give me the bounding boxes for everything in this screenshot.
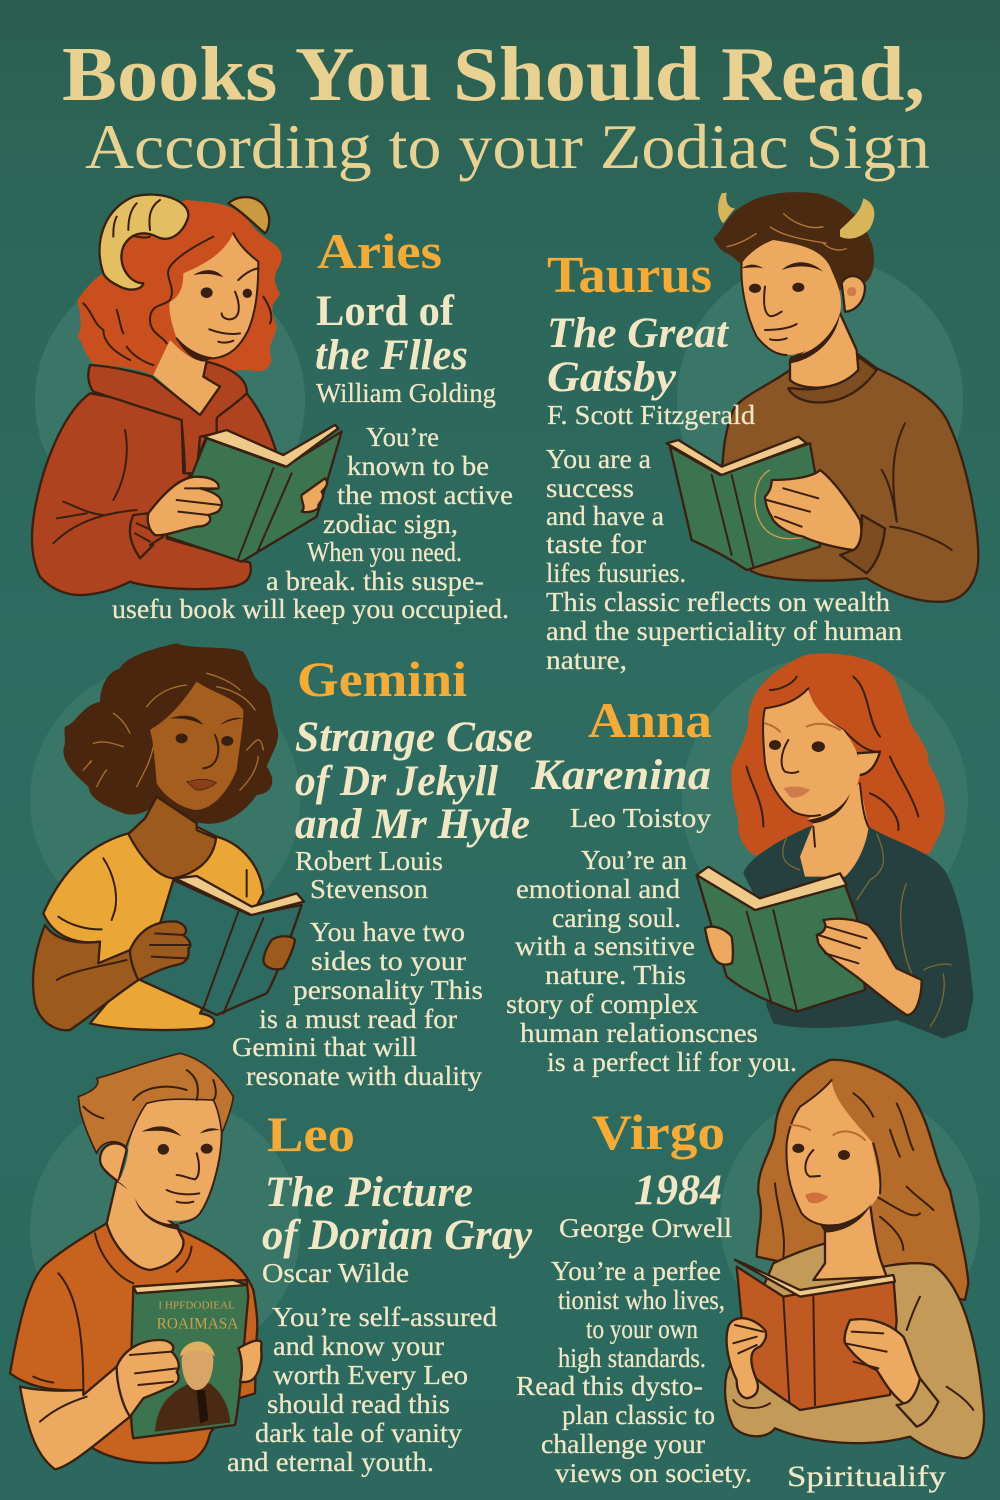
text block: Aries description: You’re — [366, 422, 439, 452]
text block: Taurus description: lifes fusuries. — [546, 558, 686, 588]
panel: Leo — [10, 1053, 533, 1477]
text block: Virgo description — [516, 1256, 752, 1488]
text block: Anna Karenina description: emotional and — [516, 874, 681, 904]
text block: Virgo description: You’re a perfee — [551, 1256, 721, 1286]
text block: Leo description: You’re self-assured — [272, 1302, 498, 1332]
book title: Lord of the Flles — [315, 288, 468, 379]
text block: Leo description: should read this — [267, 1389, 450, 1419]
book title: Lord of the Flles: the Flles — [315, 332, 468, 379]
text block: Gemini description: is a must read for — [259, 1004, 457, 1034]
illustration: reader with long red hair — [697, 653, 973, 1038]
author: William Golding: William Golding — [316, 378, 496, 408]
book title: Strange Case of Dr Jekyll and Mr Hyde: Strange Case — [295, 714, 533, 761]
book title: The Great Gatsby — [547, 310, 730, 401]
text block: Gemini description: Gemini that will — [232, 1032, 417, 1062]
text block: Aries description: usefu book will keep you occupied. — [112, 594, 509, 624]
title: According to your Zodiac Sign — [85, 112, 930, 182]
text block: Leo description — [227, 1302, 498, 1477]
text block: Virgo description: Read this dysto- — [516, 1371, 703, 1401]
text block: Virgo description: tionist who lives, — [558, 1285, 725, 1315]
text block: Virgo description: high standards. — [558, 1343, 706, 1373]
text block: Aries description: known to be — [347, 451, 489, 481]
illustration: Taurus reader with bull horns — [667, 192, 978, 602]
illustration: Leo reader with Dorian Gray book: I HPFDODIEAL — [158, 1300, 235, 1311]
text block: Leo description: worth Every Leo — [273, 1360, 468, 1390]
book title: Strange Case of Dr Jekyll and Mr Hyde: of Dr Jekyll — [295, 758, 498, 805]
heading: Virgo: Virgo — [592, 1104, 725, 1160]
credit: Spiritualify: Spiritualify — [787, 1460, 946, 1493]
book title: Lord of the Flles: Lord of — [316, 288, 455, 335]
text block: Anna Karenina description: human relationscnes — [520, 1018, 758, 1048]
text block: Taurus description: taste for — [546, 529, 646, 559]
book title: The Great Gatsby: Gatsby — [547, 354, 677, 401]
text block: Gemini description: resonate with duality — [246, 1061, 483, 1091]
book title: The Picture of Dorian Gray — [262, 1169, 533, 1259]
text block: Gemini description: personality This — [293, 975, 483, 1005]
heading: Aries: Aries — [317, 223, 442, 279]
text block: Aries description: zodiac sign, — [323, 509, 458, 539]
author: Robert Louis Stevenson — [295, 846, 443, 904]
book title: Anna Karenina — [530, 692, 712, 799]
text block: Anna Karenina description: is a perfect lif for you. — [547, 1047, 797, 1077]
text block: Anna Karenina description — [506, 845, 797, 1077]
book title: Strange Case of Dr Jekyll and Mr Hyde: and Mr Hyde — [295, 801, 530, 848]
text block: Anna Karenina description: nature. This — [545, 960, 686, 990]
text block: Anna Karenina description: with a sensitive — [515, 931, 695, 961]
book title: The Picture of Dorian Gray: The Picture — [265, 1169, 473, 1216]
text block: Gemini description: You have two — [310, 917, 465, 947]
text block: Taurus description: and the superticiality of human — [546, 616, 903, 646]
text block: Aries description: When you need. — [307, 537, 462, 567]
illustration: Virgo reader with long auburn hair — [725, 1060, 984, 1458]
text block: Taurus description — [546, 444, 903, 675]
text block: Virgo description: plan classic to — [562, 1400, 715, 1430]
text block: Virgo description: to your own — [586, 1314, 698, 1344]
text block: Leo description: and eternal youth. — [227, 1447, 434, 1477]
text block: Aries description: the most active — [337, 480, 513, 510]
text block: Virgo description: challenge your — [541, 1429, 705, 1459]
text block: Anna Karenina description: story of complex — [506, 989, 699, 1019]
book title: Anna Karenina: Anna — [588, 692, 712, 748]
book title: Anna Karenina: Karenina — [530, 752, 711, 799]
book title: The Picture of Dorian Gray: of Dorian Gray — [262, 1212, 533, 1259]
text block: Leo description: dark tale of vanity — [255, 1418, 463, 1448]
title: Books You Should Read, — [62, 31, 925, 117]
illustration: Leo reader with Dorian Gray book — [10, 1053, 262, 1469]
text block: Gemini description — [232, 917, 483, 1091]
text block: Taurus description: success — [546, 473, 634, 503]
heading: Taurus: Taurus — [547, 247, 712, 304]
text block: Virgo description: views on society. — [555, 1458, 752, 1488]
book title: Strange Case of Dr Jekyll and Mr Hyde — [295, 714, 533, 848]
author: Robert Louis Stevenson: Robert Louis — [295, 846, 443, 876]
author: Leo Toistoy: Leo Toistoy — [570, 803, 712, 833]
book title: The Great Gatsby: The Great — [547, 310, 730, 357]
text block: Taurus description: and have a — [546, 501, 664, 531]
text block: Taurus description: You are a — [546, 444, 651, 474]
panel: Aries — [32, 195, 513, 624]
panel: Virgo — [516, 1060, 984, 1488]
author: George Orwell: George Orwell — [559, 1213, 732, 1243]
text block: Taurus description: nature, — [546, 645, 627, 675]
text block: Aries description — [112, 422, 513, 624]
author: Robert Louis Stevenson: Stevenson — [310, 874, 429, 904]
illustration: Gemini reader with curly hair — [33, 643, 304, 1030]
book title: 1984: 1984 — [634, 1167, 722, 1214]
panel: Taurus — [546, 192, 978, 675]
author: F. Scott Fitzgerald: F. Scott Fitzgerald — [547, 400, 756, 430]
author: Oscar Wilde: Oscar Wilde — [262, 1258, 409, 1288]
text block: Anna Karenina description: You’re an — [581, 845, 687, 875]
text block: Taurus description: This classic reflects on wealth — [546, 587, 891, 617]
panel: Gemini — [33, 643, 533, 1091]
text block: Leo description: and know your — [273, 1331, 444, 1361]
title — [62, 31, 930, 182]
panel: Cancer (Anna Karenina) — [506, 653, 973, 1077]
text block: Anna Karenina description: caring soul. — [552, 903, 681, 933]
heading: Leo: Leo — [267, 1106, 355, 1162]
text block: Gemini description: sides to your — [311, 946, 466, 976]
text block: Aries description: a break. this suspe- — [266, 566, 484, 596]
illustration: Aries reader with ram horns — [32, 195, 342, 595]
illustration: Leo reader with Dorian Gray book: ROAIMASA — [157, 1316, 238, 1333]
heading: Gemini: Gemini — [297, 651, 467, 707]
